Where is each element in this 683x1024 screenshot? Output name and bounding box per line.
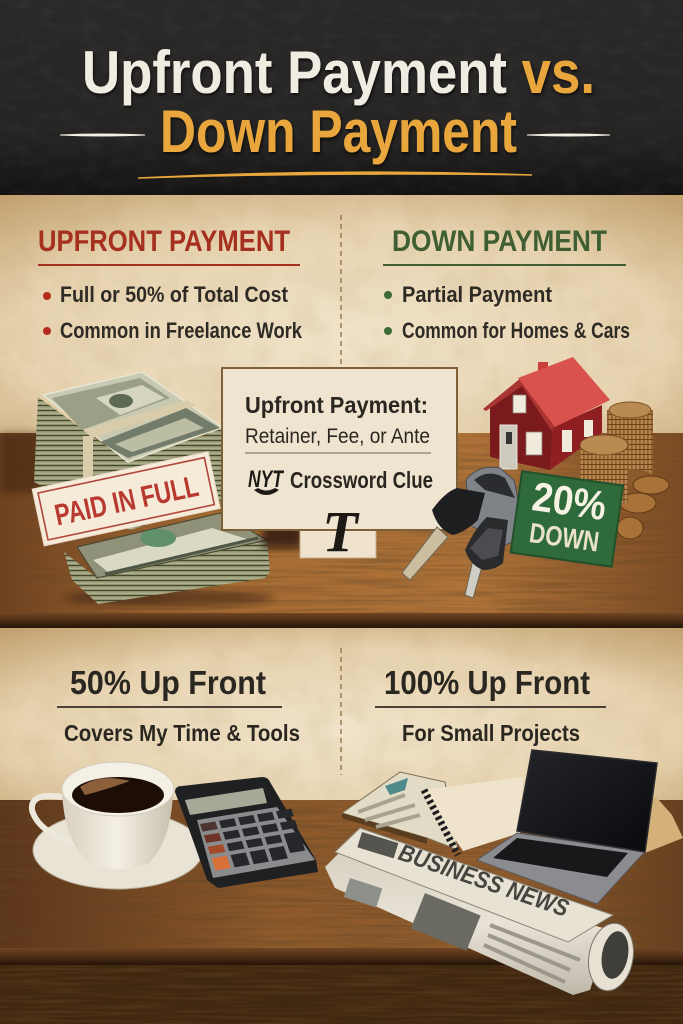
- icon: car keys: [402, 488, 508, 598]
- sign: 20% down: [511, 471, 623, 567]
- heading: 100% up front: 100% Up Front: [384, 664, 590, 701]
- card heading: Upfront Payment:: [245, 392, 428, 418]
- list: down: Partial Payment: [402, 282, 553, 307]
- crossword clue text: Crossword Clue: [290, 467, 433, 493]
- panel: lower parchment: [0, 628, 683, 802]
- title accent: left line: [60, 134, 145, 136]
- panel: upper wood shelf: [0, 433, 683, 629]
- icon: bottom money stack: [64, 513, 275, 606]
- sign: 20% down: DOWN: [527, 517, 601, 558]
- T logo: T: [322, 499, 360, 564]
- card subheading: Retainer, Fee, or Ante: [245, 425, 430, 448]
- heading rule: [375, 706, 606, 708]
- divider dashed: [340, 215, 342, 425]
- card tab: [300, 510, 376, 558]
- heading rule: [57, 706, 282, 708]
- icon: toy car: [466, 467, 518, 545]
- divider dashed: [340, 648, 342, 775]
- icon: magazine and notebook: [342, 772, 683, 855]
- newspaper headline: BUSINESS NEWS: [395, 839, 572, 923]
- icon: calculator: [175, 777, 318, 888]
- title: Upfront Payment vs.: Upfront Payment vs.: [82, 39, 595, 106]
- text: for small projects: For Small Projects: [402, 720, 580, 746]
- panel: upper parchment comparison: [0, 195, 683, 435]
- heading: 50% up front: 50% Up Front: [70, 664, 266, 701]
- sign: 20% down: 20%: [530, 473, 609, 529]
- list: down: [384, 282, 630, 343]
- list: upfront: Common in Freelance Work: [60, 318, 303, 343]
- stamp tag: Paid in Full: PAID IN FULL: [52, 470, 202, 533]
- heading rule red: [38, 264, 300, 266]
- stamp tag: Paid in Full: [32, 452, 220, 546]
- icon: house: [483, 357, 610, 470]
- panel: lower wood shelf: [0, 800, 683, 1024]
- icon: coffee cup and saucer: [32, 762, 203, 889]
- icon: laptop: [477, 750, 657, 904]
- title underline: [138, 172, 532, 178]
- card divider: [245, 452, 431, 454]
- list: upfront: Full or 50% of Total Cost: [60, 282, 289, 307]
- icon: front coin stack: [580, 435, 628, 503]
- title: Down Payment: Down Payment: [160, 98, 517, 165]
- NYT logo: NYT: [248, 466, 285, 493]
- title accent: right line: [527, 134, 610, 136]
- icon: rolled business newspaper: [325, 828, 639, 995]
- text: covers my time and tools: Covers My Time & Tools: [64, 720, 300, 746]
- panel: chalkboard header: [0, 0, 683, 196]
- icon: top money stack: [34, 372, 226, 530]
- heading rule green: [383, 264, 626, 266]
- panel: center crossword card: [222, 368, 457, 564]
- list: upfront: [43, 282, 303, 343]
- list: down: Common for Homes & Cars: [402, 318, 630, 343]
- heading: Down Payment: DOWN PAYMENT: [392, 225, 607, 258]
- icon: coin stacks: [607, 402, 669, 539]
- heading: Upfront Payment: UPFRONT PAYMENT: [38, 225, 290, 258]
